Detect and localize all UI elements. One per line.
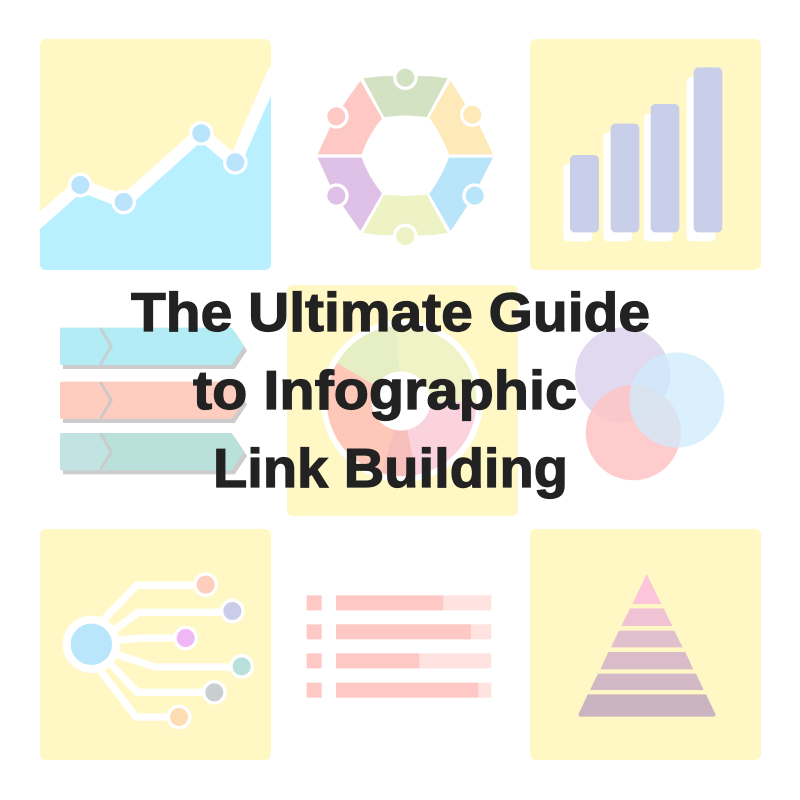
hub node <box>67 620 116 669</box>
circle: purple <box>575 327 670 423</box>
branches <box>97 585 242 717</box>
row 2 <box>307 624 491 639</box>
venn diagram <box>575 327 724 480</box>
bars <box>570 67 722 232</box>
hexagon ring diagram <box>318 65 493 248</box>
slice: rose <box>381 401 416 476</box>
title line 3: Link Building <box>213 437 568 499</box>
slice: light green <box>396 326 477 402</box>
circle: pink <box>586 385 681 480</box>
row 4 <box>307 683 491 698</box>
row 1 <box>307 595 491 610</box>
title line 2: to Infographic <box>193 359 577 421</box>
pyramid tier 2 <box>621 608 672 626</box>
segment: yellow upper right <box>429 81 493 154</box>
donut hole <box>372 372 430 430</box>
slice: salmon <box>327 363 402 473</box>
pyramid tier 5 <box>590 674 704 690</box>
circle: blue <box>629 352 724 448</box>
trend line <box>30 70 275 229</box>
segment: blue lower right <box>429 158 493 231</box>
title line 1: The Ultimate Guide <box>131 281 650 343</box>
donut outer ring <box>321 320 483 482</box>
segment: purple lower left <box>318 158 382 231</box>
panel: tree diagram <box>40 529 271 760</box>
arrow 1 <box>60 328 247 369</box>
panel: line chart <box>30 39 275 270</box>
data points <box>70 123 246 213</box>
progress bars list <box>307 595 491 698</box>
slice: pink <box>402 401 476 475</box>
leaf nodes <box>168 574 252 728</box>
segment: pink upper left <box>318 81 382 154</box>
panel: bar chart <box>530 39 761 270</box>
pyramid tier 3 <box>611 631 683 647</box>
area fill <box>40 79 271 270</box>
segment: green top <box>363 65 448 117</box>
panel: pyramid <box>530 529 761 760</box>
pyramid tier 1 <box>632 574 661 604</box>
pyramid tier 4 <box>600 652 693 669</box>
arrow list <box>60 328 247 474</box>
title <box>131 281 650 499</box>
pyramid tier 6 <box>578 694 716 717</box>
panel: donut chart <box>287 285 518 516</box>
arrow 3 <box>60 433 247 474</box>
bar shadows <box>563 77 715 241</box>
arrow 2 <box>60 382 247 423</box>
row 3 <box>307 653 491 668</box>
slice: darker green <box>337 326 402 401</box>
segment: lime bottom <box>363 195 448 248</box>
